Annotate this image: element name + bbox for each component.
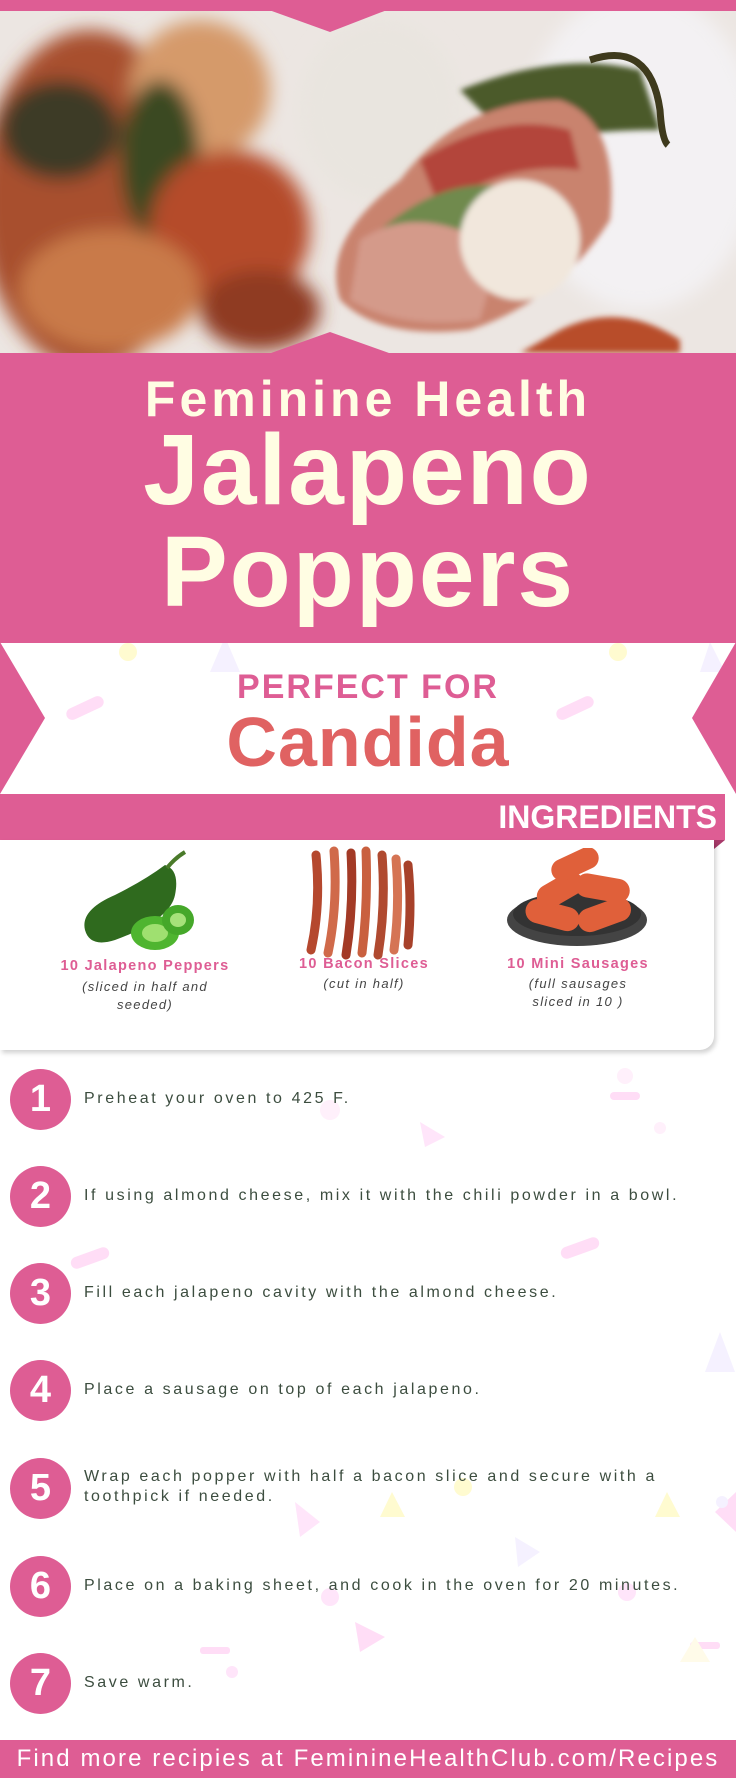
text: sausages label: [507, 956, 649, 1009]
ribbon: perfect for candida: [0, 643, 736, 794]
step 6: 6: [30, 1565, 51, 1607]
title: Jalapeno Poppers: Poppers: [161, 516, 575, 628]
step 2: [10, 1166, 679, 1227]
panel: ingredients card: [0, 840, 714, 1050]
step 5: Wrap each popper with half a bacon slice and secure with a: [84, 1468, 657, 1485]
top header strip: [0, 0, 736, 353]
title: Jalapeno Poppers: Jalapeno: [143, 414, 593, 526]
step 6: [10, 1556, 680, 1617]
icon: bacon: [306, 846, 414, 960]
text: jalapeno label: 10 Jalapeno Peppers: [61, 958, 229, 974]
ingredients header bar: [0, 794, 725, 840]
step 3: 3: [30, 1272, 51, 1314]
subtitle: PERFECT FOR: PERFECT FOR: [237, 668, 499, 706]
background confetti: [66, 643, 736, 1678]
step 7: Save warm.: [84, 1674, 194, 1691]
step 5: 5: [30, 1467, 51, 1509]
step 5: [10, 1458, 657, 1519]
subtitle: Candida: Candida: [226, 703, 510, 781]
heading: INGREDIENTS: INGREDIENTS: [498, 799, 717, 835]
footer: Find more recipies at FeminineHealthClub.com/Recipes: [17, 1745, 719, 1772]
footer: [0, 1740, 736, 1778]
step 2: 2: [30, 1175, 51, 1217]
text: bacon label: (cut in half): [323, 976, 405, 991]
step 2: If using almond cheese, mix it with the chili powder in a bowl.: [84, 1187, 679, 1204]
title: Feminine Health: Feminine Health: [145, 371, 591, 427]
step 6: Place on a baking sheet, and cook in the oven for 20 minutes.: [84, 1577, 680, 1594]
step 3: Fill each jalapeno cavity with the almond cheese.: [84, 1284, 558, 1301]
step 5: toothpick if needed.: [84, 1488, 275, 1505]
step 3: [10, 1263, 558, 1324]
step 1: Preheat your oven to 425 F.: [84, 1090, 351, 1107]
step 7: 7: [30, 1662, 51, 1704]
text: jalapeno label: [61, 958, 229, 1012]
step 1: [10, 1069, 351, 1130]
step 4: Place a sausage on top of each jalapeno.: [84, 1381, 482, 1398]
text: bacon label: [299, 956, 429, 991]
icon: sausages: [507, 848, 647, 946]
text: sausages label: (full sausages: [529, 976, 627, 991]
step 7: [10, 1653, 194, 1714]
text: jalapeno label: (sliced in half and: [82, 979, 208, 994]
step 1: 1: [30, 1078, 51, 1120]
text: bacon label: 10 Bacon Slices: [299, 956, 429, 972]
hero photo: [0, 0, 736, 370]
text: sausages label: 10 Mini Sausages: [507, 956, 649, 972]
icon: jalapeno: [84, 850, 194, 950]
step 4: [10, 1360, 482, 1421]
text: sausages label: sliced in 10 ): [532, 994, 624, 1009]
title: Jalapeno Poppers: [143, 414, 593, 628]
text: jalapeno label: seeded): [117, 997, 173, 1012]
title band: [0, 353, 736, 643]
step 4: 4: [30, 1369, 51, 1411]
